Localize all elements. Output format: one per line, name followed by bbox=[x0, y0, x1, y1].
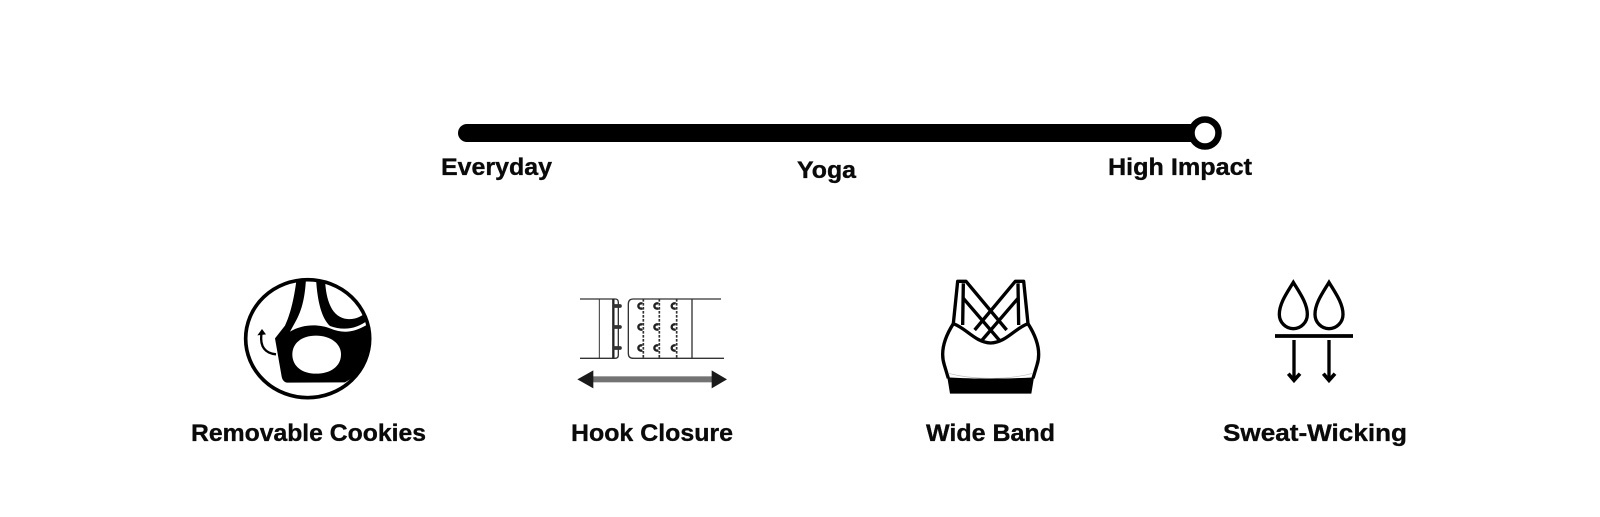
label: Hook Closure: Hook Closure bbox=[571, 420, 733, 447]
feature: wide band bbox=[926, 281, 1055, 447]
icon: hook and eye closure bbox=[577, 299, 727, 388]
label: Everyday: Everyday bbox=[441, 154, 552, 181]
label: Wide Band: Wide Band bbox=[926, 420, 1055, 447]
label: Yoga: Yoga bbox=[797, 157, 856, 184]
icon: sweat drops and arrows bbox=[1275, 282, 1353, 381]
feature: removable cookies bbox=[191, 278, 426, 447]
icon: bra cup with removable cookie bbox=[246, 278, 372, 398]
feature: hook closure bbox=[571, 299, 733, 447]
label: Removable Cookies: Removable Cookies bbox=[191, 420, 426, 447]
scale marker bbox=[1192, 120, 1218, 146]
label: High Impact: High Impact bbox=[1108, 154, 1252, 181]
icon: sports bra with wide band bbox=[943, 281, 1039, 394]
label: Sweat-Wicking: Sweat-Wicking bbox=[1223, 420, 1407, 447]
feature: sweat-wicking bbox=[1223, 282, 1407, 447]
scale track bbox=[458, 124, 1203, 142]
intensity scale bbox=[441, 120, 1252, 184]
